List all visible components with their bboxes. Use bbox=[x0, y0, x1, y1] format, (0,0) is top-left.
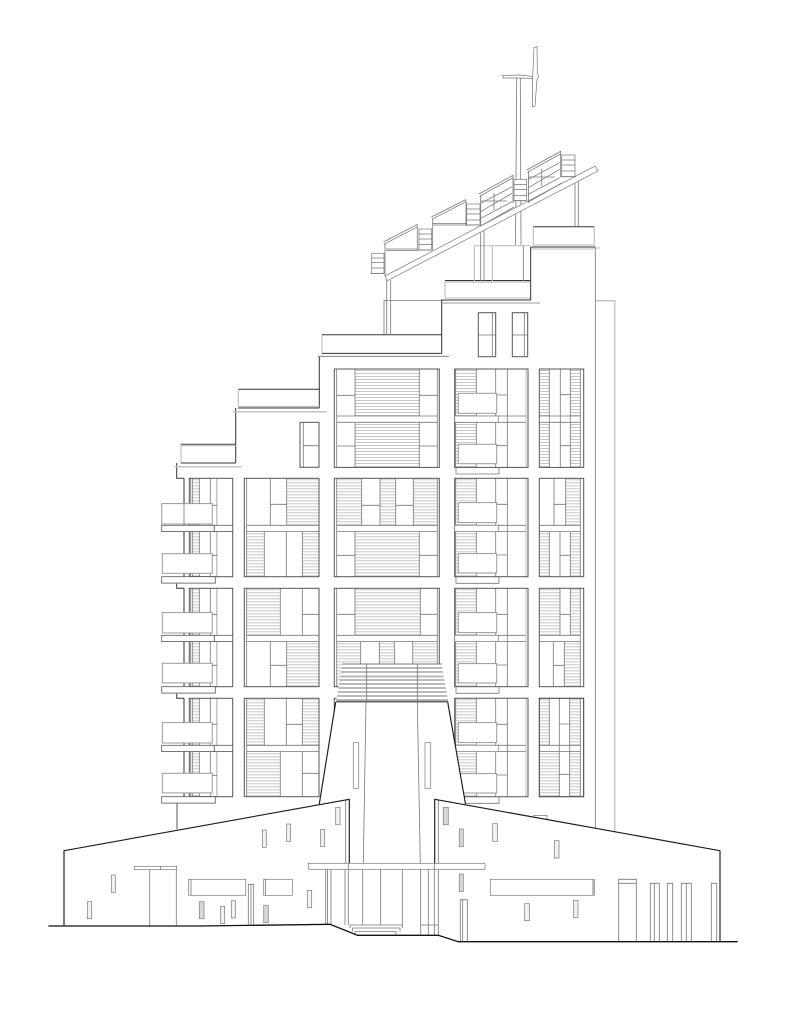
louvre stack 1 bbox=[371, 253, 385, 274]
entrance canopy and columns bbox=[308, 863, 485, 935]
window row 1 bbox=[334, 478, 439, 577]
right wing bbox=[435, 799, 720, 942]
left wing door and canopy bbox=[134, 866, 177, 926]
window row 2 bbox=[334, 588, 439, 687]
cone slit left bbox=[353, 743, 359, 788]
bay row 2 bbox=[162, 588, 233, 698]
window row 1 bbox=[244, 478, 319, 577]
window bbox=[300, 422, 319, 467]
left wing bbox=[64, 799, 349, 926]
wind turbine bbox=[502, 46, 538, 245]
top floor small windows bbox=[300, 313, 528, 467]
right side light wall bbox=[596, 301, 615, 832]
window row 0 bbox=[334, 369, 439, 467]
right wing slit windows bbox=[443, 807, 578, 921]
panel 3 bbox=[479, 175, 514, 226]
window row 0 bbox=[539, 369, 584, 467]
louvre stack 4 bbox=[514, 179, 527, 201]
louvre stack 2 bbox=[418, 229, 433, 250]
panel 1 bbox=[384, 224, 418, 276]
column B: shutter windows bbox=[244, 478, 319, 797]
column A: left balconies bbox=[162, 478, 233, 829]
right wing tall doors and windows bbox=[460, 879, 717, 941]
bay row 3 bbox=[162, 698, 233, 829]
bay row 1 bbox=[162, 478, 233, 588]
window row 3 stub bbox=[334, 698, 439, 797]
window row 3 bbox=[539, 698, 584, 797]
window row 1 bbox=[539, 478, 584, 577]
cone slit right bbox=[425, 743, 431, 788]
louvre stack 3 bbox=[466, 204, 481, 225]
window bbox=[478, 313, 496, 357]
window row 2 bbox=[455, 588, 528, 693]
column D: windows with balconies bbox=[450, 369, 528, 803]
window row 3 bbox=[450, 698, 528, 803]
window row 0 bbox=[455, 369, 528, 474]
left wing narrow door bbox=[248, 884, 254, 926]
panel 2 bbox=[431, 200, 466, 250]
roof slab bbox=[385, 166, 598, 281]
column E: narrow shutter windows bbox=[539, 369, 584, 797]
louvred hood bbox=[336, 664, 448, 702]
rooftop parapets bbox=[181, 227, 594, 463]
left wing ribbon windows bbox=[189, 879, 292, 895]
upper plant room and supports bbox=[387, 178, 578, 335]
window row 3 bbox=[244, 698, 319, 797]
left wing slit windows bbox=[87, 807, 340, 924]
window bbox=[512, 313, 528, 357]
ground line bbox=[48, 924, 738, 942]
right wing ribbon window bbox=[490, 879, 594, 895]
louvre stack 5 bbox=[561, 155, 576, 177]
window row 1 bbox=[455, 478, 528, 583]
entrance stairs bbox=[350, 925, 402, 935]
solar panel array bbox=[371, 151, 576, 276]
window row 2 bbox=[539, 588, 584, 687]
central entrance cone bbox=[319, 702, 466, 863]
panel 4 bbox=[527, 151, 562, 203]
window row 2 bbox=[244, 588, 319, 687]
building outline with stepped roofline bbox=[174, 247, 600, 828]
column C: central shutter windows bbox=[334, 369, 439, 797]
